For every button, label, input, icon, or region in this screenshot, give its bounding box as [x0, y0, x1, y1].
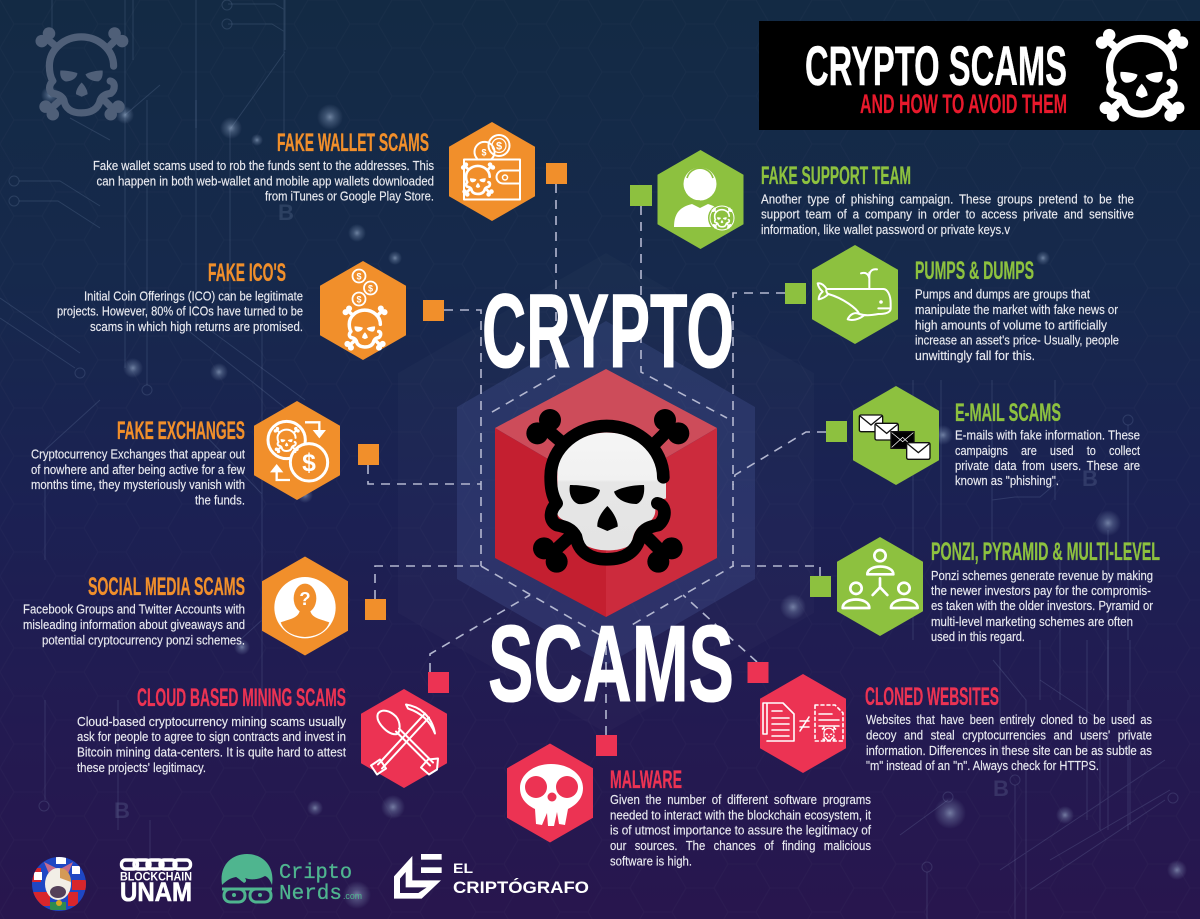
panel: cloud based mining scams: ask for people to agree to sign contracts and invest in: [77, 729, 346, 744]
panel: social media scams: [23, 556, 386, 656]
panel: fake ico's: Initial Coin Offerings (ICO) can be legitimate: [84, 288, 303, 304]
icon: shovel and pickaxe: [361, 689, 447, 788]
panel: cloned websites: decoy and steal cryptocurrencies and users' private: [866, 728, 1152, 742]
logo: blockchain unam: BLOCKCHAIN: [120, 872, 192, 884]
icon: wallet: [449, 122, 535, 221]
faint bitcoin marks: B: [278, 200, 294, 225]
panel: cloned websites: [748, 662, 1152, 773]
panel: fake exchanges: FAKE EXCHANGES: [117, 417, 245, 445]
icon: support agent with headset: [658, 150, 744, 249]
panel: fake ico's: FAKE ICO'S: [208, 259, 286, 287]
panel: fake ico's: scams in which high returns are promised.: [90, 319, 303, 334]
panel: ponzi, pyramid and multi-level: [810, 537, 1160, 644]
panel: fake wallet scams: FAKE WALLET SCAMS: [277, 129, 429, 157]
panel: fake support team: [630, 150, 1134, 249]
panel: e-mail scams: [826, 386, 1140, 488]
panel: cloud based mining scams: [77, 672, 449, 788]
panel: malware: needed to interact with the blockchain ecosystem, it: [610, 808, 871, 822]
icon: skull coin swapped for dollar coin: [254, 401, 340, 500]
panel: fake exchanges: months time, they mysteriously vanish with: [31, 477, 245, 492]
panel: fake wallet scams: from iTunes or Google Play Store.: [265, 188, 434, 204]
panel: ponzi, pyramid and multi-level: Ponzi schemes generate revenue by making: [931, 568, 1153, 583]
logo: el criptografo: CRIPTÓGRAFO: [453, 878, 589, 897]
panel: ponzi, pyramid and multi-level: es taken with the older investors. Pyramid or: [931, 598, 1154, 613]
icon: referral people tree: [837, 537, 923, 636]
logo: cripto nerds: .com: [343, 891, 362, 901]
panel: fake support team: Another type of phishing campaign. These groups pretend to be the: [761, 192, 1134, 206]
logo: cripto nerds: Cripto: [279, 862, 352, 885]
panel: pumps and dumps: increase an asset's price- Usually, people: [915, 332, 1119, 348]
panel: e-mail scams: E-mails with fake information. These: [955, 428, 1140, 442]
panel: cloned websites: CLONED WEBSITES: [865, 683, 999, 711]
panel: fake exchanges: the funds.: [195, 492, 245, 508]
logo: el criptografo: EL: [453, 860, 474, 876]
panel: cloud based mining scams: CLOUD BASED MINING SCAMS: [137, 684, 346, 712]
panel: social media scams: SOCIAL MEDIA SCAMS: [88, 573, 245, 601]
panel: fake exchanges: of nowhere and after being active for a few: [31, 462, 246, 477]
panel: cloud based mining scams: Bitcoin mining data-centers. It is quite hard to attest: [77, 744, 346, 760]
panel: fake wallet scams: [93, 122, 567, 221]
panel: ponzi, pyramid and multi-level: the newer investors pay for the compromis-: [931, 583, 1151, 598]
dashed connector lines: [368, 184, 826, 735]
panel: malware: [507, 735, 871, 868]
panel: cloned websites: information. Differences in these site can be as subtle as: [866, 743, 1152, 758]
panel: malware: our sources. The chances of finding malicious: [610, 838, 871, 853]
panel: social media scams: misleading information about giveaways and: [23, 617, 245, 632]
panel: malware: Given the number of different software programs: [610, 792, 871, 807]
icon: anonymous profile: ?: [299, 588, 311, 609]
panel: social media scams: potential cryptocurrency ponzi schemes.: [42, 632, 245, 648]
logo: bulldog: [32, 856, 86, 911]
panel: fake wallet scams: can happen in both web-wallet and mobile app wallets downloaded: [96, 174, 434, 188]
icon: wallet: $: [496, 140, 502, 152]
panel: e-mail scams: private data from users. These are: [955, 458, 1140, 473]
faint bitcoin marks: B: [993, 776, 1009, 801]
panel: e-mail scams: known as "phishing".: [955, 473, 1059, 488]
main title: crypto: CRYPTO: [482, 273, 734, 390]
panel: fake ico's: projects. However, 80% of ICOs have turned to be: [57, 304, 303, 318]
panel: pumps and dumps: unwittingly fall for this.: [915, 348, 1035, 363]
panel: fake ico's: [57, 259, 444, 360]
panel: pumps and dumps: [785, 245, 1119, 363]
icon: skull coin swapped for dollar coin: $: [302, 450, 316, 477]
main title: scams: SCAMS: [488, 603, 734, 725]
panel: fake support team: support team of a company in order to access private and sensitive: [761, 206, 1134, 222]
logo: cripto nerds: [222, 854, 362, 906]
icon: envelopes: [853, 386, 939, 485]
logo: cripto nerds: Nerds: [279, 883, 342, 906]
ghost skull icon, top left: [36, 27, 128, 121]
logo: blockchain unam: UNAM: [120, 877, 192, 907]
icon: coins and skull: [320, 261, 406, 360]
title banner: [759, 21, 1200, 130]
panel: e-mail scams: campaigns are used to collect: [955, 443, 1140, 458]
panel: fake support team: FAKE SUPPORT TEAM: [761, 162, 911, 190]
title banner: AND HOW TO AVOID THEM: [860, 89, 1067, 119]
panel: cloud based mining scams: Cloud-based cryptocurrency mining scams usually: [77, 714, 346, 729]
panel: cloud based mining scams: these projects' legitimacy.: [77, 760, 206, 775]
panel: fake support team: information, like wallet password or private keys.v: [761, 222, 1010, 237]
icon: coins and skull: $: [356, 294, 362, 304]
logo: blockchain unam: [120, 860, 192, 907]
panel: ponzi, pyramid and multi-level: multi-level marketing schemes are often: [931, 614, 1133, 629]
icon: document vs fake document: [760, 674, 846, 773]
panel: pumps and dumps: manipulate the market with fake news or: [915, 302, 1119, 317]
panel: pumps and dumps: high amounts of volume to artificially: [915, 318, 1107, 332]
panel: pumps and dumps: Pumps and dumps are groups that: [915, 286, 1090, 302]
icon: coins and skull: $: [356, 272, 362, 282]
panel: social media scams: Facebook Groups and Twitter Accounts with: [23, 602, 245, 616]
panel: cloned websites: "m" instead of an "n". Always check for HTTPS.: [866, 758, 1099, 773]
central red cube with skull: [495, 369, 717, 617]
icon: whale: [812, 245, 898, 344]
panel: fake exchanges: Cryptocurrency Exchanges that appear out: [31, 446, 245, 462]
faint bitcoin marks: B: [1082, 466, 1098, 491]
logo: el criptografo: [394, 854, 589, 899]
icon: wallet: $: [481, 148, 487, 158]
panel: e-mail scams: E-MAIL SCAMS: [955, 399, 1061, 427]
icon: anonymous profile: [262, 556, 348, 656]
panel: malware: MALWARE: [610, 766, 682, 794]
central background hexagons: [398, 253, 814, 733]
icon: coins and skull: $: [368, 284, 373, 294]
panel: malware: is of utmost importance to assure the legitimacy of: [610, 822, 871, 838]
panel: ponzi, pyramid and multi-level: used in this regard.: [931, 629, 1025, 644]
panel: pumps and dumps: PUMPS & DUMPS: [915, 257, 1034, 285]
panel: cloned websites: Websites that have been entirely cloned to be used as: [866, 712, 1152, 727]
panel: fake exchanges: [31, 401, 379, 508]
panel: malware: software is high.: [610, 854, 692, 868]
panel: fake wallet scams: Fake wallet scams used to rob the funds sent to the addresses. This: [93, 158, 434, 173]
faint bitcoin marks: [114, 200, 1098, 823]
icon: white skull: [507, 744, 593, 842]
faint bitcoin marks: B: [114, 798, 130, 823]
